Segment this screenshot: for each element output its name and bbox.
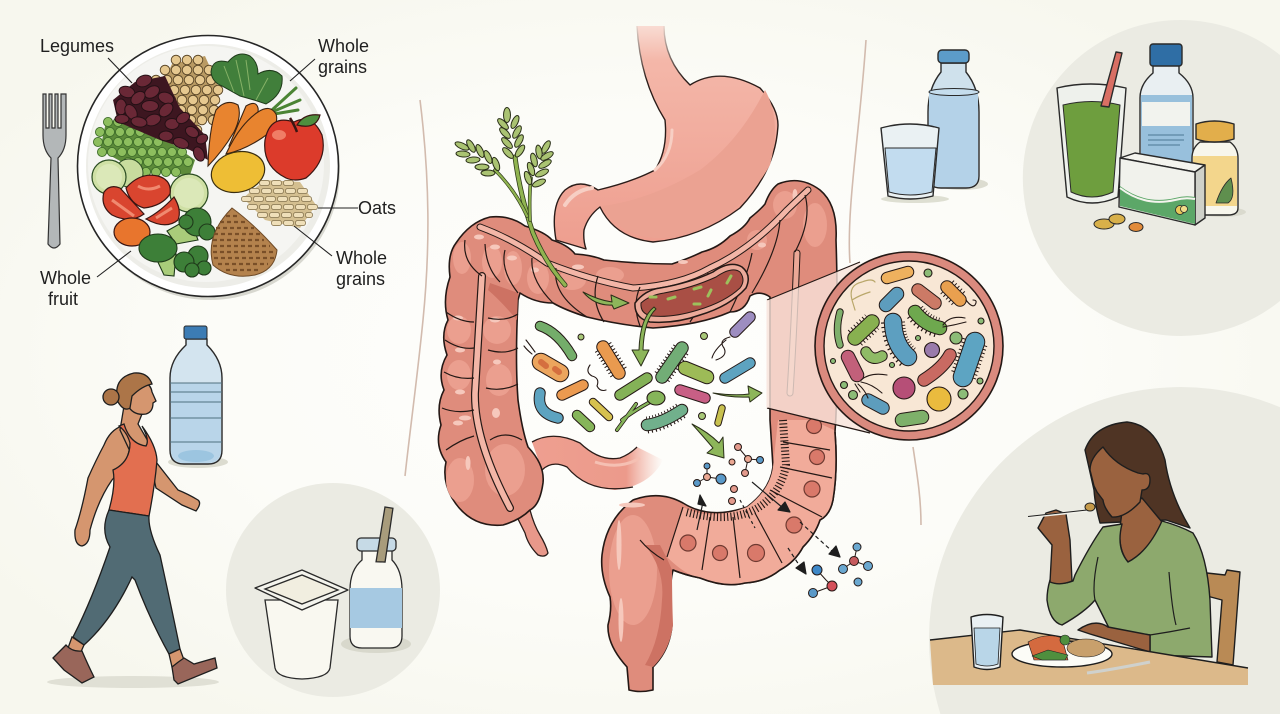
table bbox=[930, 630, 1248, 685]
food: chickpeas bbox=[156, 56, 222, 130]
bodies bbox=[887, 272, 908, 278]
food: red apple bbox=[265, 115, 323, 180]
icon: supplement box bbox=[1119, 153, 1205, 225]
plate of foods bbox=[78, 36, 340, 300]
appendix bbox=[517, 510, 548, 556]
arrow: fibre to colon bbox=[583, 292, 629, 309]
forearm and hand bbox=[1038, 510, 1072, 584]
plate bbox=[78, 36, 340, 300]
label: oats: Oats bbox=[358, 198, 396, 218]
torso and sleeve: green sweater bbox=[1047, 521, 1212, 657]
flagella and squiggles bbox=[524, 337, 730, 390]
bacteria bodies bbox=[540, 326, 572, 356]
person walking bbox=[47, 373, 219, 688]
icon: yogurt cup bbox=[255, 570, 348, 679]
magnify beam bbox=[767, 262, 870, 433]
icon: capsules bbox=[1094, 214, 1143, 232]
cell nuclei bbox=[680, 418, 824, 562]
icon: fork bbox=[43, 94, 66, 248]
food: tomatoes bbox=[103, 175, 179, 246]
food: peas bbox=[98, 116, 195, 175]
label: whole fruit: Whole bbox=[40, 268, 91, 288]
food: oats bbox=[243, 180, 316, 228]
colon shadows bbox=[488, 283, 673, 667]
food: leafy greens bbox=[211, 54, 282, 104]
hand at table bbox=[1078, 623, 1150, 652]
fork and bite bbox=[1028, 511, 1087, 517]
haustra creases bbox=[442, 195, 807, 560]
food: whole grains bbox=[211, 208, 277, 276]
front arm bbox=[152, 462, 200, 511]
colon haustra highlights bbox=[446, 191, 827, 625]
shoes bbox=[53, 645, 94, 683]
inner details bbox=[541, 362, 559, 372]
woman eating bbox=[930, 422, 1248, 685]
free bacteria bbox=[524, 317, 750, 430]
molecules bbox=[694, 444, 872, 598]
background panel: bottom right circle bbox=[929, 387, 1280, 714]
face bbox=[1090, 447, 1150, 517]
plant fibre sprig bbox=[454, 108, 565, 285]
arm creases bbox=[1094, 557, 1190, 635]
food: carrot greens bbox=[272, 88, 300, 114]
label: whole grains bottom: Whole bbox=[336, 248, 387, 268]
legs: leggings bbox=[73, 510, 180, 654]
spikes bbox=[603, 347, 682, 425]
food: cucumber slices bbox=[92, 159, 208, 212]
outlines bbox=[838, 272, 975, 420]
food: lemon bbox=[207, 146, 269, 198]
arrow: colon to bacteria bbox=[632, 307, 656, 366]
chair bbox=[1207, 570, 1240, 665]
spikes bbox=[855, 287, 975, 377]
hair bbox=[1085, 422, 1190, 528]
label: whole grains top: Whole bbox=[318, 36, 369, 56]
fork on table bbox=[1087, 662, 1150, 673]
plate with salad bbox=[1012, 641, 1112, 667]
icon: plastic water bottle bbox=[168, 326, 228, 468]
label: whole grains bottom: grains bbox=[336, 269, 385, 289]
flagella bbox=[855, 300, 976, 398]
neck bbox=[1120, 498, 1162, 562]
food: kidney beans bbox=[113, 73, 209, 163]
magnified bacteria circle bbox=[815, 252, 1003, 440]
cell dividers bbox=[667, 442, 832, 578]
absorption arrows bbox=[697, 482, 840, 574]
Y-shaped green microbe bbox=[617, 402, 650, 430]
label: legumes: Legumes bbox=[40, 36, 114, 56]
icon: glass bottle behind bbox=[928, 50, 988, 190]
microvilli bbox=[686, 420, 786, 517]
food: carrots bbox=[208, 102, 277, 166]
ankles bbox=[68, 637, 184, 667]
colon outline redraw near cells bbox=[673, 432, 836, 585]
arrow: bacteria to magnified view bbox=[713, 386, 762, 402]
label: whole grains top: grains bbox=[318, 57, 367, 77]
icon: milk bottle with straw bbox=[341, 507, 411, 653]
back arm bbox=[75, 426, 130, 546]
gut illustration bbox=[438, 26, 1248, 692]
body outline lines bbox=[405, 40, 921, 525]
chest and neck bbox=[120, 406, 152, 462]
colon haustra shine bbox=[453, 189, 798, 642]
label lines bbox=[97, 58, 358, 277]
background panel: yogurt circle bbox=[226, 483, 440, 697]
icon: green smoothie glass bbox=[1057, 52, 1126, 203]
icon: glass of water bbox=[881, 50, 988, 203]
icon: supplement bottle blue bbox=[1140, 44, 1193, 165]
cell wall band bbox=[667, 420, 836, 585]
colon bbox=[438, 181, 837, 692]
esophagus and stomach bbox=[554, 26, 778, 249]
colon cross-section bbox=[635, 264, 748, 322]
head bbox=[128, 383, 156, 414]
torso: orange tank top bbox=[109, 424, 157, 516]
icon: small jar bbox=[1192, 121, 1246, 217]
background panel: top right circle bbox=[1023, 20, 1280, 336]
food: broccoli bbox=[139, 208, 215, 277]
label: whole fruit: fruit bbox=[48, 289, 78, 309]
small intestine end bbox=[532, 436, 663, 490]
water glass bbox=[971, 614, 1003, 670]
tenia stripes bbox=[475, 190, 808, 508]
arrow: bacteria to metabolites bbox=[692, 424, 724, 458]
bacteria outlines bbox=[539, 317, 750, 427]
